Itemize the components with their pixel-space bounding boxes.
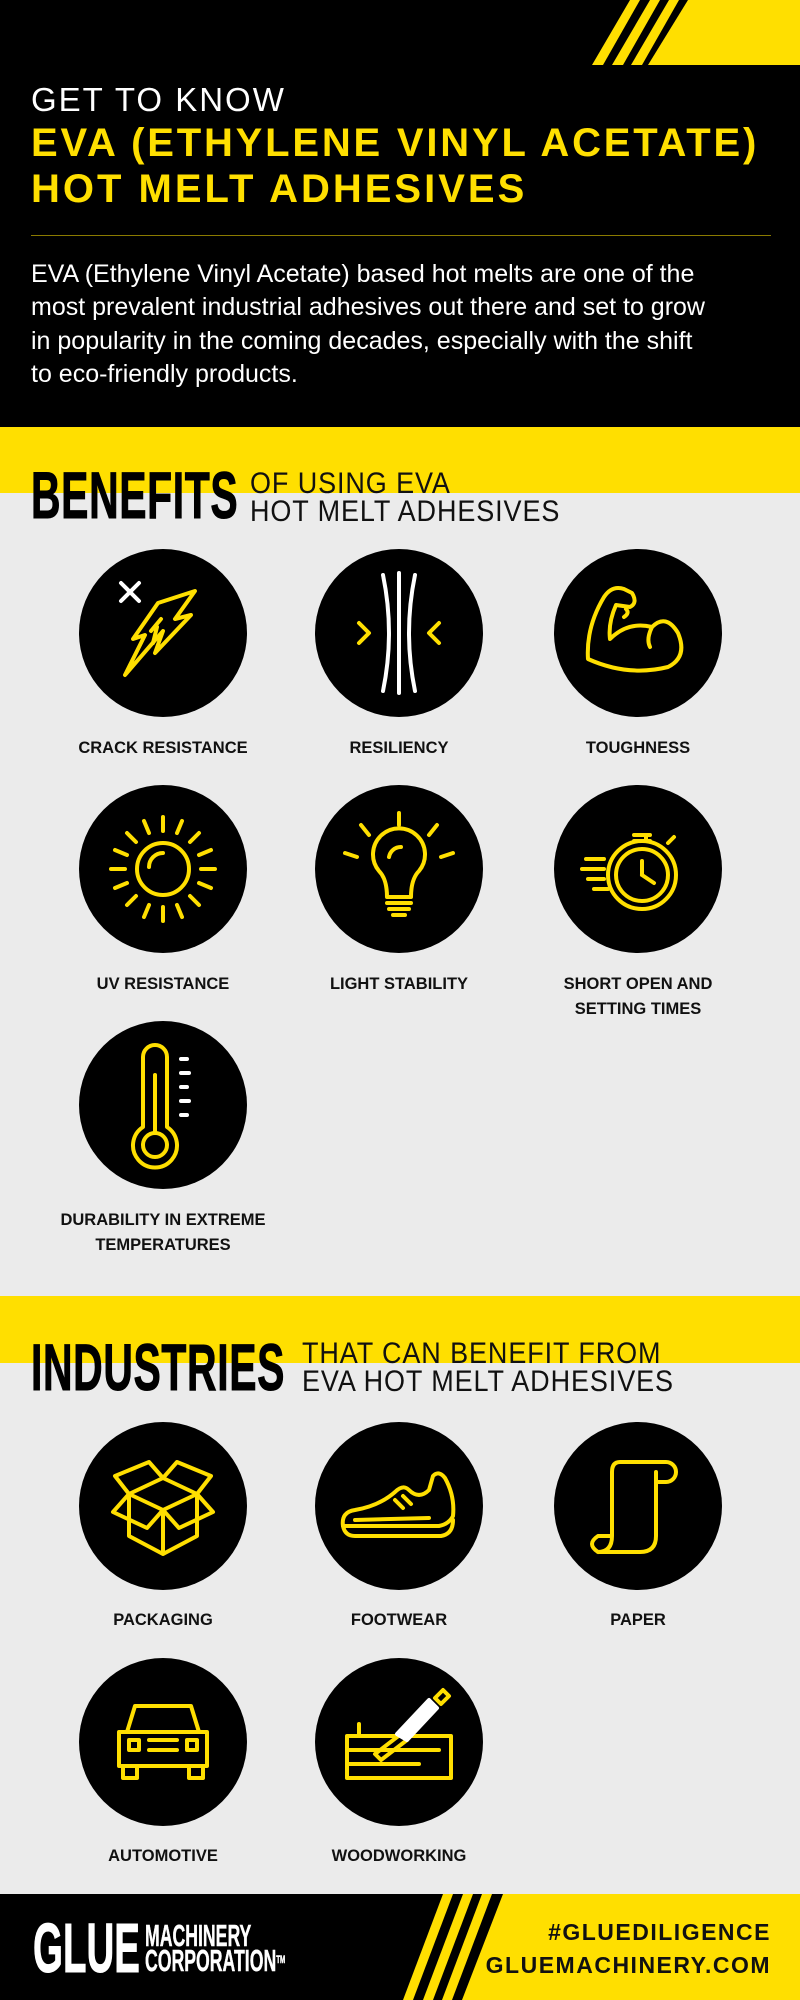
label: short open <box>564 975 712 1018</box>
icon: packaging <box>79 1422 247 1590</box>
label: paper: PAPER <box>610 1611 666 1629</box>
industries heading: INDUSTRIES <box>31 1330 285 1404</box>
industries heading <box>31 1330 674 1404</box>
footer stripes <box>403 1894 800 2000</box>
footer <box>0 1894 800 2000</box>
logo: MACHINERY <box>145 1918 251 1953</box>
benefits heading <box>31 458 560 532</box>
yellow band benefits <box>0 427 800 493</box>
icon: crack resistance <box>79 549 247 717</box>
icon: UV resistance <box>79 785 247 953</box>
header stripes <box>592 0 800 65</box>
title <box>31 81 759 211</box>
label: light stability: LIGHT STABILITY <box>330 975 468 993</box>
label: resiliency: RESILIENCY <box>349 739 449 757</box>
label: short open: SETTING TIMES <box>575 1000 701 1018</box>
label: durability: TEMPERATURES <box>95 1236 231 1254</box>
industries heading: EVA HOT MELT ADHESIVES <box>302 1365 674 1398</box>
footer links: #GLUEDILIGENCE <box>548 1919 771 1945</box>
icon: toughness <box>554 549 722 717</box>
header panel <box>0 0 800 427</box>
title: EVA (ETHYLENE VINYL ACETATE) <box>31 121 759 165</box>
footer links: GLUEMACHINERY.COM <box>486 1952 771 1978</box>
benefits heading: HOT MELT ADHESIVES <box>250 495 560 528</box>
label: toughness: TOUGHNESS <box>586 739 690 757</box>
icon: thermometer <box>79 1021 247 1189</box>
icon: footwear <box>315 1422 483 1590</box>
label: UV resistance: UV RESISTANCE <box>97 975 229 993</box>
label: woodworking: WOODWORKING <box>332 1847 466 1865</box>
label: durability: DURABILITY IN EXTREME <box>60 1211 266 1229</box>
icon: woodworking <box>315 1658 483 1826</box>
label: packaging: PACKAGING <box>113 1611 213 1629</box>
icon: paper <box>554 1422 722 1590</box>
footer links <box>486 1919 771 1978</box>
icon: light stability <box>315 785 483 953</box>
label: crack resistance: CRACK RESISTANCE <box>78 739 248 757</box>
title: HOT MELT ADHESIVES <box>31 167 527 211</box>
label: footwear: FOOTWEAR <box>351 1611 447 1629</box>
icon: stopwatch <box>554 785 722 953</box>
title: GET TO KNOW <box>31 81 286 118</box>
label: automotive: AUTOMOTIVE <box>108 1847 218 1865</box>
industries heading: THAT CAN BENEFIT FROM <box>302 1337 661 1370</box>
icon: automotive <box>79 1658 247 1826</box>
logo: GLUE <box>33 1909 140 1987</box>
intro text: EVA (Ethylene Vinyl Acetate) based hot melts are one of the most prevalent industrial adhesives out there and set to grow in popularity in the coming decades, especially with the shift to eco-friendly products. <box>31 260 705 388</box>
logo <box>33 1909 285 1987</box>
benefits heading: BENEFITS <box>31 458 238 532</box>
yellow band industries <box>0 1296 800 1363</box>
label: durability <box>60 1211 266 1254</box>
label: short open: SHORT OPEN AND <box>564 975 712 993</box>
benefits heading: OF USING EVA <box>250 467 451 500</box>
icon: resiliency <box>315 549 483 717</box>
logo: CORPORATIONTM <box>145 1943 285 1978</box>
